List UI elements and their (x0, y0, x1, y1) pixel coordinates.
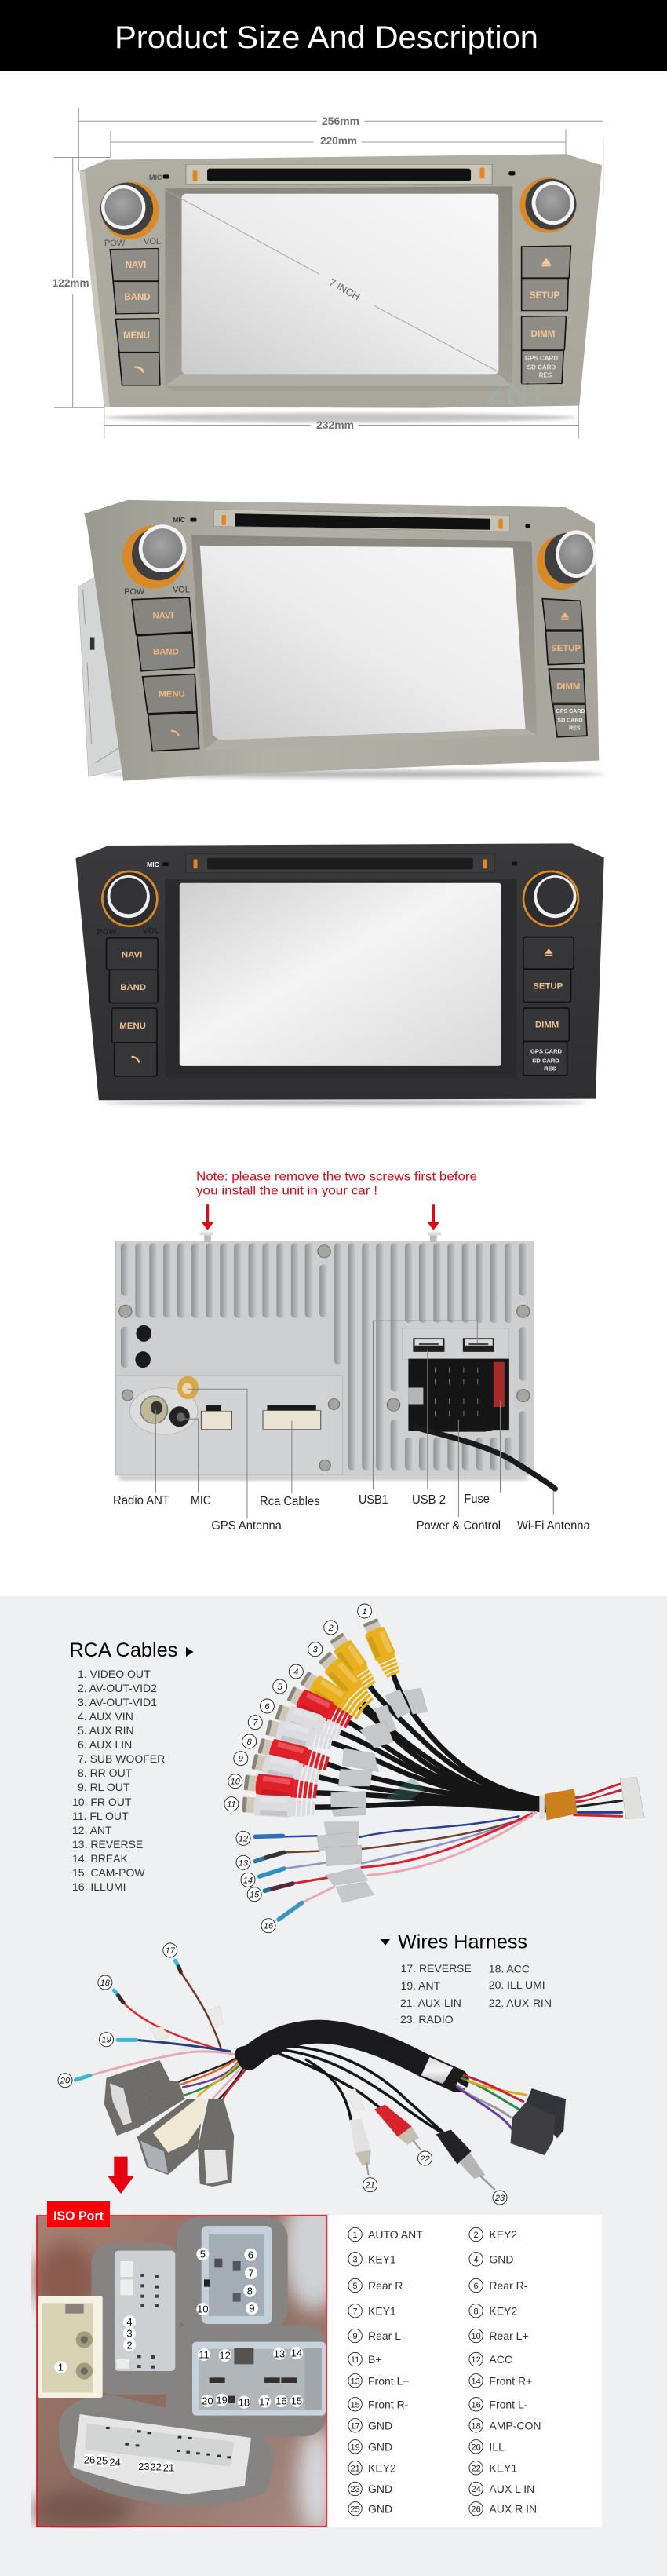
screws (119, 1245, 530, 1471)
list: 4. AUX VIN (78, 1710, 133, 1723)
right column: GND (489, 2253, 514, 2265)
antenna jacks (129, 1376, 199, 1434)
right column: 20 (471, 2443, 481, 2452)
left knob (101, 870, 159, 927)
pin numbers: 6 (248, 2249, 253, 2260)
pin numbers: 18 (239, 2396, 250, 2408)
numbered markers 1-16: 12 (239, 1834, 248, 1843)
title banner (0, 0, 667, 71)
panel: angled silver head unit (78, 500, 604, 781)
left column: GND (368, 2502, 392, 2515)
left column: GND (368, 2419, 392, 2432)
panel: pin table (328, 2215, 602, 2527)
numbered markers 1-16: 11 (227, 1800, 236, 1810)
numbered markers 1-16: 5 (278, 1683, 283, 1692)
connector labels: USB 2 (412, 1493, 446, 1507)
left column: KEY1 (368, 2304, 396, 2317)
button labels: NAVI (122, 951, 142, 960)
left column: 23 (350, 2485, 360, 2494)
title text: Product Size And Description (115, 20, 538, 55)
right knob (537, 530, 597, 590)
unit labels: POW (104, 239, 126, 248)
black cables (315, 1675, 549, 1810)
pin numbers: 20 (202, 2395, 213, 2407)
right knob (523, 870, 579, 927)
cooling fins (121, 1243, 527, 1471)
right column: 6 (474, 2282, 479, 2291)
knob labels: VOL (143, 927, 159, 936)
right column: 24 (471, 2485, 481, 2494)
screen bezel (191, 535, 537, 750)
pin numbers: 13 (274, 2348, 285, 2359)
usb bay (402, 1328, 509, 1359)
connector labels: GPS Antenna (211, 1519, 282, 1533)
rca and antenna plugs (350, 2105, 494, 2189)
cable bundle (255, 1675, 644, 1920)
pin numbers: 1 (58, 2362, 64, 2373)
unit labels: VOL (144, 237, 161, 247)
white number dots (54, 2248, 303, 2474)
button labels: SETUP (533, 982, 563, 992)
numbered markers 1-16 (224, 1604, 372, 1933)
pin numbers: 9 (249, 2303, 255, 2315)
dimension lines (54, 108, 603, 439)
tag on aux cable (344, 2088, 365, 2110)
wifi cable (415, 1427, 555, 1489)
right column: 18 (471, 2421, 481, 2431)
list: 18. ACC (489, 1963, 530, 1975)
button labels: MENU (119, 1021, 146, 1031)
button labels: SETUP (551, 644, 581, 653)
right column: 4 (474, 2255, 479, 2264)
tags (150, 2006, 224, 2052)
left column: 15 (350, 2400, 360, 2410)
unit labels: RES (539, 372, 552, 378)
button labels: RES (544, 1065, 556, 1072)
connector labels: Radio ANT (113, 1494, 169, 1507)
left column: KEY2 (368, 2461, 396, 2474)
pin numbers: 17 (259, 2395, 271, 2407)
disc slot (190, 510, 530, 532)
sleeve band (421, 2057, 453, 2085)
knob labels: POW (97, 928, 116, 937)
silver unit drawing (79, 154, 602, 422)
left column: 13 (350, 2377, 360, 2386)
note: you install the unit in your car ! (196, 1184, 377, 1198)
button labels: BAND (153, 648, 179, 657)
dimension labels (53, 115, 363, 431)
list: 15. CAM-POW (72, 1866, 145, 1879)
button labels: GPS CARD (530, 1048, 563, 1055)
right column: ILL (489, 2440, 505, 2453)
rear chassis (78, 576, 123, 776)
list: 1. VIDEO OUT (78, 1668, 151, 1680)
knob labels: MIC (173, 516, 186, 524)
numbered markers 1-16: 3 (313, 1646, 319, 1655)
pin numbers: 21 (163, 2462, 174, 2474)
numbered markers 1-16: 13 (239, 1858, 249, 1868)
right column: 10 (471, 2332, 481, 2341)
panel: dimensioned silver head unit (53, 108, 603, 439)
right column: 2 (474, 2231, 479, 2240)
buttons (107, 937, 574, 1076)
right column: Rear R- (489, 2279, 528, 2292)
left column: GND (368, 2483, 392, 2495)
knob labels (124, 516, 190, 597)
button labels: SD CARD (557, 718, 582, 723)
loose wires (90, 1972, 235, 2075)
foam connectors (104, 2060, 234, 2187)
grey background panel (0, 1596, 667, 2576)
list (400, 1962, 552, 2026)
panel: black head unit (75, 843, 604, 1105)
button labels: SD CARD (532, 1058, 559, 1065)
unit labels (104, 174, 559, 411)
right column: 8 (474, 2307, 479, 2316)
black cables (276, 2045, 443, 2132)
right column: ACC (489, 2353, 512, 2366)
rca connectors (242, 1617, 403, 1819)
disc slot (163, 854, 517, 873)
wire end sleeves (255, 1836, 302, 1920)
shadow (102, 1100, 587, 1105)
unit labels: NAVI (126, 261, 146, 270)
rear chassis drawing (115, 1204, 555, 1518)
right column: 22 (471, 2464, 481, 2473)
unit labels: GPS CARD (525, 355, 558, 362)
pin numbers: 24 (109, 2457, 121, 2468)
right column: KEY1 (489, 2461, 517, 2474)
right column: 26 (471, 2505, 481, 2514)
numbered markers 17-23: 18 (100, 1979, 111, 1988)
unit labels: DIMM (531, 330, 555, 339)
iso port label (47, 2201, 110, 2227)
right column: Rear L+ (489, 2329, 529, 2342)
connector labels: Fuse (464, 1493, 490, 1506)
numbered markers 17-23: 19 (101, 2036, 111, 2045)
left column: 7 (353, 2307, 358, 2316)
harness sleeve (249, 2032, 457, 2081)
iso leads (457, 2075, 527, 2130)
collar and plug (539, 1777, 644, 1820)
button labels: NAVI (152, 612, 173, 621)
wire tips (75, 1960, 180, 2080)
pin numbers: 14 (291, 2348, 302, 2359)
unit labels: ZNT (487, 376, 548, 411)
connector b (202, 2226, 272, 2324)
numbered markers 1-16: 4 (293, 1668, 298, 1677)
button labels: BAND (120, 983, 146, 992)
left column: KEY1 (368, 2253, 396, 2265)
numbered markers 17-23: 20 (60, 2077, 71, 2086)
right column: 14 (471, 2377, 481, 2386)
panel: rca cables (69, 1604, 644, 1933)
right column: KEY2 (489, 2304, 517, 2317)
colourful wires to connectors (179, 2057, 249, 2099)
photo (31, 2214, 330, 2528)
list: 8. RR OUT (78, 1767, 133, 1779)
left column (348, 2227, 423, 2516)
left column: Rear R+ (368, 2279, 410, 2292)
left column: Rear L- (368, 2329, 405, 2342)
connector labels: MIC (191, 1494, 211, 1507)
numbered markers 1-16: 7 (253, 1719, 258, 1728)
screen (200, 546, 525, 740)
button labels: DIMM (535, 1021, 559, 1030)
connector labels: Power & Control (417, 1519, 501, 1533)
left column: 25 (350, 2505, 360, 2514)
button labels: GPS CARD (556, 709, 585, 714)
list: 2. AV-OUT-VID2 (78, 1682, 157, 1694)
iso blocks (511, 2088, 566, 2155)
list: 3. AV-OUT-VID1 (78, 1696, 157, 1708)
panel: iso port photo (31, 2185, 345, 2534)
power connector (408, 1359, 509, 1432)
connector labels: Wi-Fi Antenna (517, 1519, 590, 1533)
numbered markers 17-23: 17 (166, 1946, 176, 1956)
numbered markers 17-23: 21 (364, 2181, 375, 2191)
button labels (152, 612, 585, 736)
left column: 3 (353, 2255, 358, 2264)
list: 14. BREAK (72, 1852, 128, 1865)
numbered markers 1-16: 16 (264, 1922, 274, 1931)
red arrow (108, 2157, 134, 2194)
pin numbers (58, 2249, 302, 2474)
numbered markers 1-16: 8 (247, 1737, 253, 1747)
left column: 17 (350, 2421, 360, 2431)
dimension labels: 256mm (322, 115, 359, 127)
foam housings (59, 2216, 327, 2506)
arrows (201, 1204, 440, 1230)
list: 10. FR OUT (72, 1796, 132, 1808)
pin numbers: 10 (197, 2304, 209, 2315)
list: 9. RL OUT (78, 1781, 130, 1793)
left column: 9 (353, 2332, 358, 2341)
numbered markers 1-16: 10 (231, 1778, 241, 1787)
knob labels: POW (124, 587, 145, 597)
panel: rear connections (113, 1170, 590, 1533)
left column: B+ (368, 2353, 382, 2366)
list: 12. ANT (72, 1824, 112, 1836)
screen (180, 883, 501, 1066)
connector e (73, 2414, 251, 2494)
pin numbers: 8 (247, 2285, 253, 2296)
list: 13. REVERSE (72, 1838, 143, 1851)
list: 7. SUB WOOFER (78, 1752, 165, 1765)
dimension labels: 7 INCH (327, 276, 363, 302)
heading: RCA Cables (69, 1639, 177, 1661)
pin numbers: 2 (126, 2339, 133, 2351)
numbered markers 1-16: 2 (328, 1624, 334, 1633)
pin numbers: 15 (291, 2395, 302, 2407)
right column (469, 2227, 541, 2516)
left column: 21 (350, 2464, 360, 2473)
pin numbers: 19 (216, 2394, 228, 2406)
list: 20. ILL UMI (489, 1979, 545, 1991)
numbered markers 17-23 (58, 1943, 507, 2205)
connector labels: Rca Cables (260, 1495, 320, 1508)
left column: 1 (353, 2231, 358, 2240)
connector labels (113, 1493, 590, 1533)
silver labels (317, 1688, 428, 1902)
list: 11. FL OUT (72, 1810, 129, 1822)
left column: Front R- (368, 2398, 409, 2410)
numbered markers 17-23: 22 (419, 2154, 430, 2164)
connector c beige (38, 2296, 103, 2398)
screws on top (200, 1232, 441, 1242)
pin numbers: 22 (150, 2461, 162, 2473)
pin numbers: 12 (219, 2350, 231, 2362)
pin numbers: 11 (199, 2349, 210, 2361)
numbered markers 1-16: 14 (243, 1876, 253, 1885)
left column: GND (368, 2440, 392, 2453)
button labels: RES (569, 726, 581, 732)
heading: Wires Harness (398, 1931, 527, 1953)
shadow (102, 770, 604, 778)
note (196, 1170, 477, 1198)
buttons (132, 597, 587, 751)
numbered markers 1-16: 1 (363, 1607, 367, 1617)
dimension labels: 232mm (316, 419, 354, 431)
dimension labels: 220mm (320, 135, 357, 147)
right column: KEY2 (489, 2228, 517, 2241)
left column: Front L+ (368, 2374, 410, 2387)
pin numbers: 4 (126, 2316, 133, 2328)
connector faces (110, 2083, 228, 2184)
rca port (263, 1405, 321, 1429)
numbered markers 1-16: 9 (239, 1755, 243, 1764)
list: 6. AUX LIN (78, 1738, 132, 1751)
iso port label: ISO Port (53, 2209, 104, 2223)
connector labels: USB1 (359, 1493, 388, 1507)
list: 19. ANT (401, 1979, 441, 1992)
pin numbers: 3 (126, 2328, 133, 2340)
small connector (201, 1405, 231, 1429)
list: 21. AUX-LIN (400, 1997, 461, 2009)
dimension labels: 122mm (53, 277, 89, 289)
pin numbers: 16 (275, 2395, 287, 2407)
button labels: DIMM (556, 682, 580, 692)
panel: wires harness (58, 1931, 566, 2205)
unit labels: MENU (123, 331, 150, 341)
button labels: MENU (159, 689, 185, 699)
mounting holes (136, 1325, 151, 1342)
faint watermark (383, 1777, 425, 1800)
pin numbers: 26 (84, 2454, 95, 2465)
pin numbers: 23 (138, 2461, 150, 2472)
unit labels: SETUP (530, 291, 559, 301)
connector plate (115, 1376, 342, 1475)
left column: AUTO ANT (368, 2228, 423, 2241)
left column: 19 (350, 2443, 360, 2452)
right column: 16 (471, 2400, 481, 2410)
knob labels: VOL (173, 585, 190, 594)
pin numbers: 7 (248, 2267, 254, 2279)
right column: AUX R IN (489, 2502, 537, 2515)
numbered markers 1-16: 15 (250, 1891, 260, 1900)
harness drawing (75, 1960, 566, 2194)
right column: AUX L IN (489, 2483, 534, 2495)
button labels (119, 948, 563, 1072)
list: 5. AUX RIN (78, 1724, 134, 1737)
knob labels: MIC (147, 860, 160, 868)
pin numbers: 5 (200, 2249, 206, 2260)
unit labels: MIC (149, 174, 162, 181)
connector a (115, 2251, 175, 2371)
left column: 11 (351, 2355, 359, 2365)
pin numbers: 25 (97, 2455, 108, 2467)
right column: Front L- (489, 2398, 528, 2410)
unit labels: BAND (124, 293, 151, 302)
connector d (192, 2342, 326, 2416)
right column: 12 (471, 2355, 481, 2365)
list: 22. AUX-RIN (489, 1997, 552, 2009)
callout lines (155, 1321, 553, 1518)
left knob (122, 524, 186, 589)
note: Note: please remove the two screws first before (196, 1170, 477, 1184)
knob labels (97, 860, 160, 937)
left column: 5 (353, 2282, 358, 2291)
right column: AMP-CON (489, 2419, 541, 2432)
numbered markers 1-16: 6 (264, 1702, 270, 1712)
faceplate (84, 500, 599, 781)
numbered markers 17-23: 23 (494, 2194, 505, 2203)
coloured thin wires (282, 1812, 536, 1902)
unit labels: SD CARD (527, 364, 556, 371)
faceplate (75, 843, 604, 1100)
list: 23. RADIO (400, 2013, 454, 2026)
right column: Front R+ (489, 2374, 532, 2387)
list: 17. REVERSE (401, 1962, 472, 1975)
list: 16. ILLUMI (72, 1880, 126, 1893)
list (72, 1668, 165, 1893)
